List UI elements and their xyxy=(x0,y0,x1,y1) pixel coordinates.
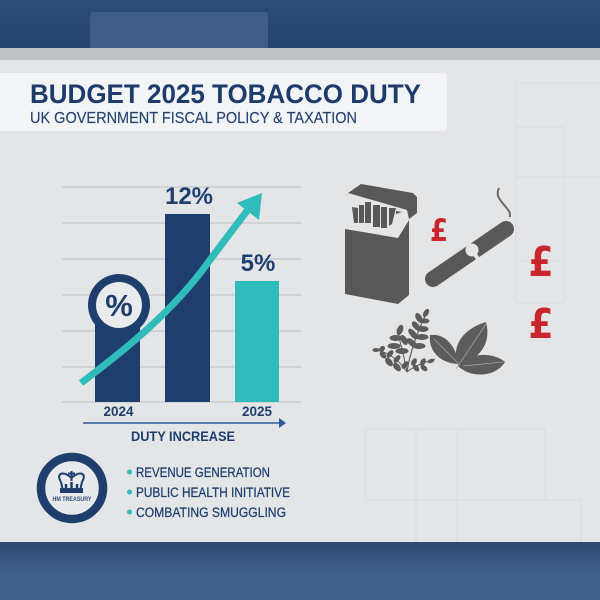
list: key points: COMBATING SMUGGLING xyxy=(136,505,286,520)
icon: percent badge: % xyxy=(105,288,133,323)
arrow: axis xyxy=(83,418,286,428)
subtitle: UK GOVERNMENT FISCAL POLICY & TAXATION xyxy=(30,110,357,127)
icon: cigarette pack xyxy=(345,184,417,304)
logo: HM Treasury xyxy=(41,457,103,519)
arrow: upward trend xyxy=(81,193,262,383)
icon: crown xyxy=(59,471,84,492)
icon: cigar xyxy=(433,188,510,279)
label: 5%: 5% xyxy=(241,250,275,277)
icon: fern xyxy=(372,308,435,373)
icon: pound small: £ xyxy=(430,213,448,249)
label: 12%: 12% xyxy=(165,183,213,210)
icon: pound large lower: £ xyxy=(528,300,554,348)
list: key points xyxy=(127,465,290,520)
label: duty increase: DUTY INCREASE xyxy=(131,428,235,444)
logo text: HM TREASURY xyxy=(52,497,92,503)
bar chart xyxy=(62,183,301,444)
icon: pound large upper: £ xyxy=(528,238,554,286)
title: BUDGET 2025 TOBACCO DUTY xyxy=(30,79,421,109)
label: 2024: 2024 xyxy=(103,404,134,419)
list: key points: PUBLIC HEALTH INITIATIVE xyxy=(136,485,290,500)
label: 2025: 2025 xyxy=(242,404,273,419)
icon: tobacco leaves xyxy=(430,322,505,375)
header band xyxy=(0,0,600,60)
title banner xyxy=(0,73,447,131)
bar: middle 12% xyxy=(165,214,210,402)
list: key points: REVENUE GENERATION xyxy=(136,465,270,480)
footer band xyxy=(0,542,600,600)
icon: percent badge xyxy=(88,274,150,336)
bar: 2024 xyxy=(95,320,140,402)
bar: 2025 5% xyxy=(235,281,279,402)
